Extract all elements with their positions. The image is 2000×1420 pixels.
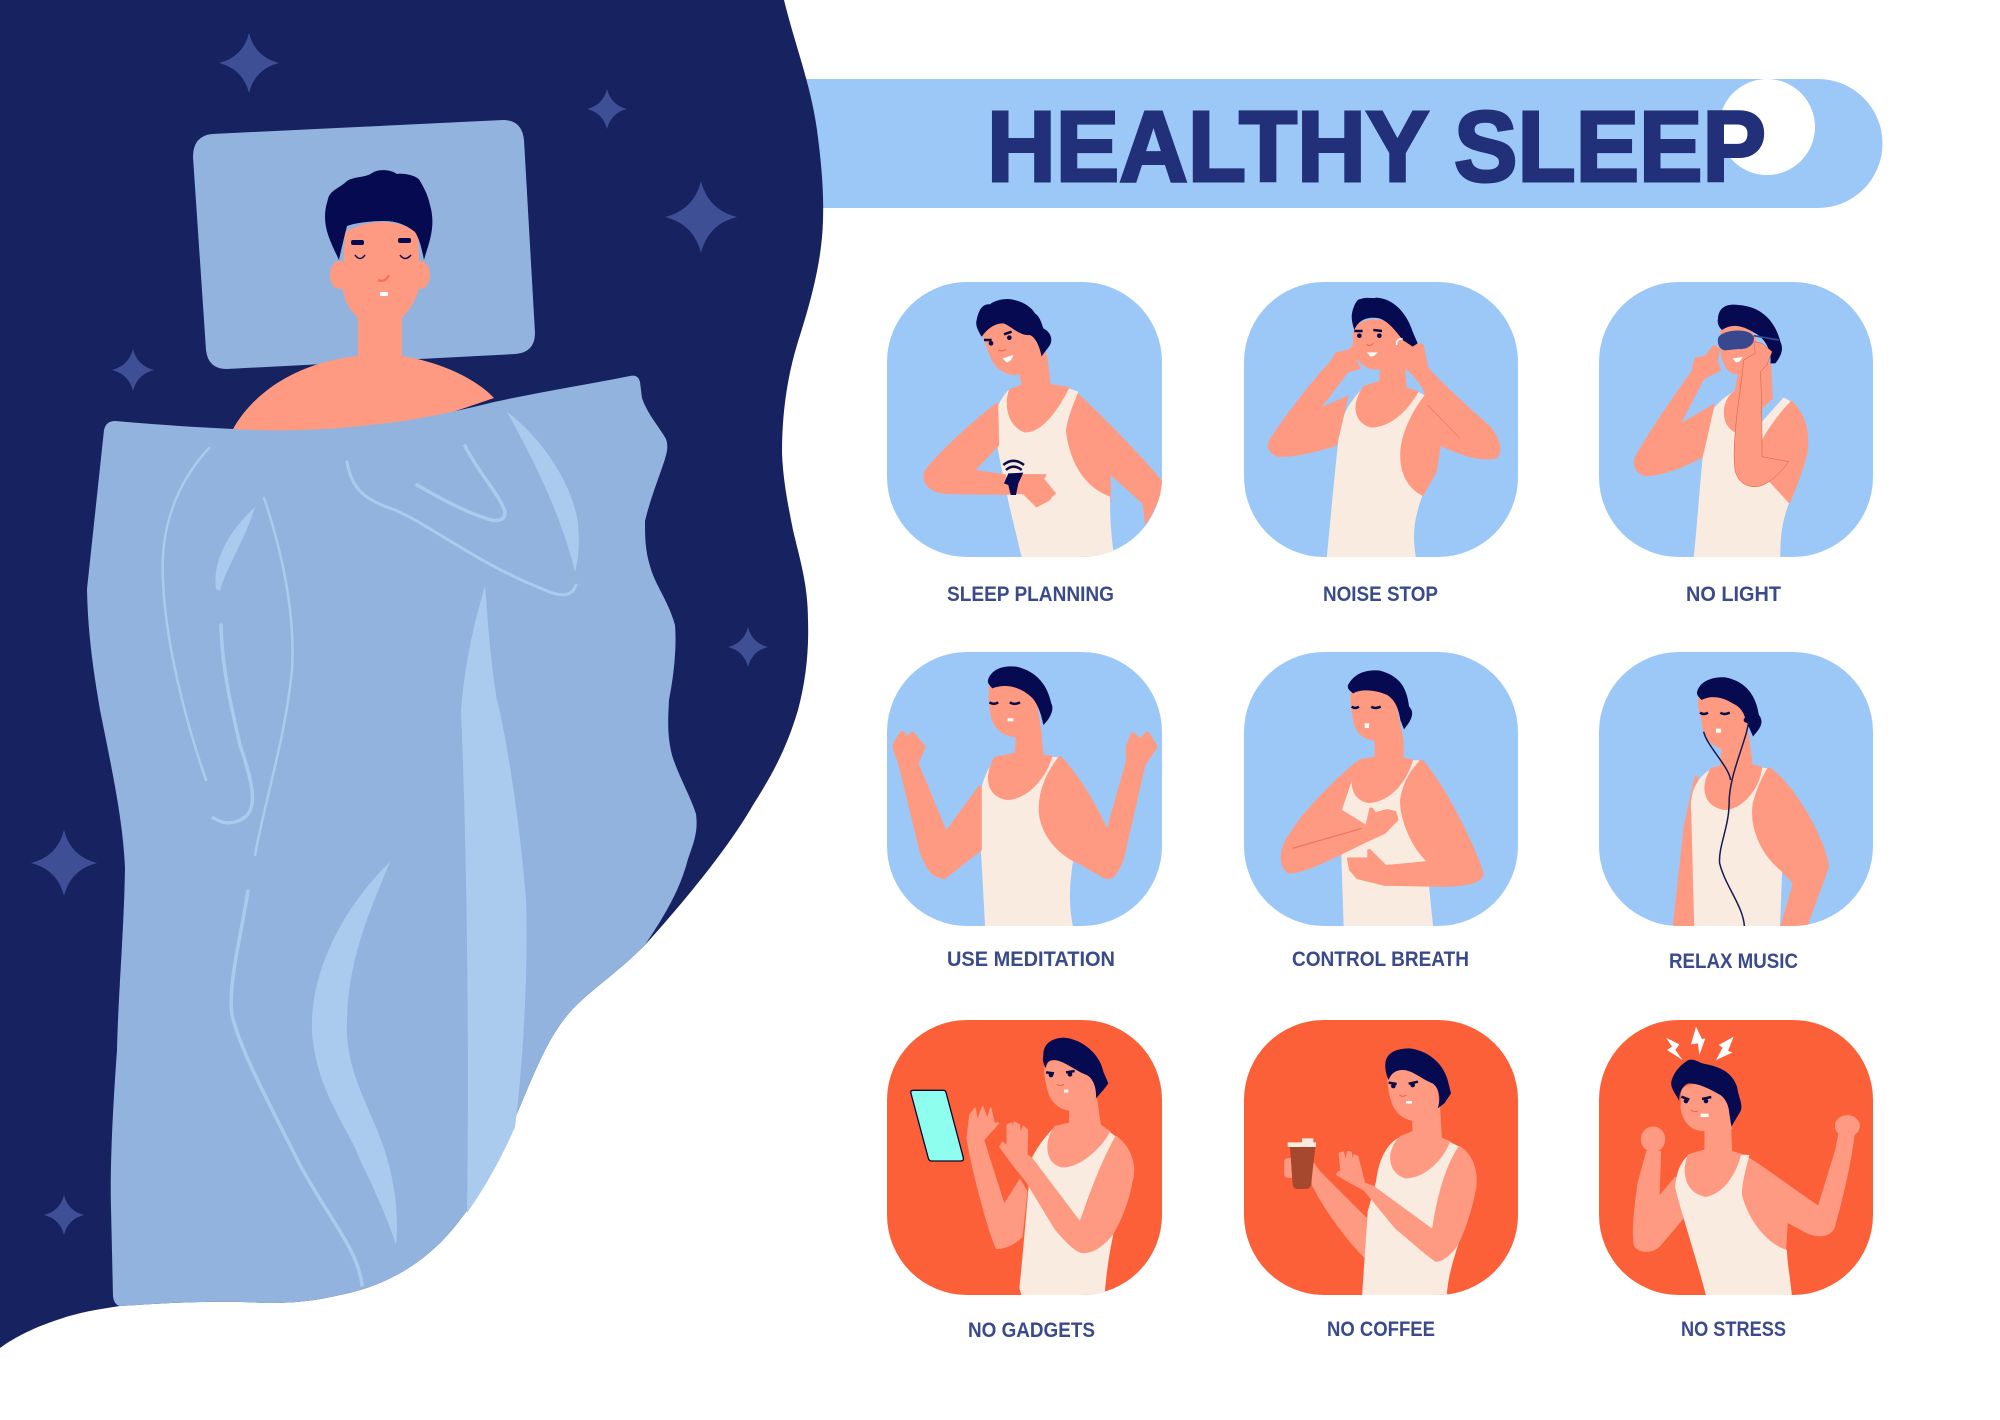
panel: sleep planning: [887, 282, 1163, 606]
icon: coffee cup: [1288, 1138, 1316, 1189]
card background: [887, 282, 1162, 557]
card background: [1599, 1020, 1873, 1295]
figure: man with earplugs: [1269, 298, 1499, 558]
blanket: [87, 376, 697, 1306]
panel: relax music: [1599, 652, 1873, 973]
label: NO COFFEE: [1327, 1318, 1435, 1341]
panel: no coffee: [1244, 1020, 1518, 1341]
card background: [1244, 282, 1518, 557]
figure: man with earphones: [1675, 677, 1827, 927]
label: RELAX MUSIC: [1669, 950, 1798, 973]
icon: moon: [1719, 79, 1815, 175]
label: SLEEP PLANNING: [947, 583, 1114, 606]
panel: use meditation: [887, 652, 1162, 971]
sleeping man: [233, 170, 494, 436]
icon: lightning bolts: [1666, 1027, 1734, 1060]
label: CONTROL BREATH: [1292, 948, 1469, 971]
figure: man refusing tablet: [911, 1038, 1133, 1298]
card background: [887, 652, 1162, 926]
label: NO GADGETS: [968, 1319, 1095, 1342]
panel: no gadgets: [887, 1020, 1162, 1342]
figure: stressed man: [1634, 1027, 1859, 1297]
icon: tablet: [911, 1090, 963, 1161]
card background: [887, 1020, 1162, 1295]
card background: [1244, 652, 1518, 926]
card background: [1599, 282, 1873, 557]
panel: night sky with sleeping man: [0, 0, 823, 1348]
night background: [0, 0, 823, 1348]
figure: man refusing coffee: [1285, 1048, 1476, 1297]
label: NOISE STOP: [1323, 583, 1438, 606]
banner bar: [790, 79, 1882, 208]
panel: no stress: [1599, 1020, 1873, 1341]
pillow: [193, 120, 535, 369]
panel: no light: [1599, 282, 1873, 606]
panel: control breath: [1244, 652, 1518, 971]
card background: [1244, 1020, 1518, 1295]
label: NO LIGHT: [1686, 583, 1781, 606]
label: NO STRESS: [1681, 1318, 1786, 1341]
title: HEALTHY SLEEP: [987, 91, 1766, 203]
figure: man breathing: [1283, 670, 1482, 927]
label: USE MEDITATION: [947, 948, 1115, 971]
title banner: [790, 79, 1882, 208]
blanket folds: [163, 412, 579, 1285]
figure: man checking watch: [924, 299, 1163, 562]
figure: man with sleep mask: [1635, 305, 1807, 558]
stars: [31, 33, 768, 1235]
panel: noise stop: [1244, 282, 1518, 606]
figure: man meditating: [895, 666, 1156, 927]
card background: [1599, 652, 1873, 926]
